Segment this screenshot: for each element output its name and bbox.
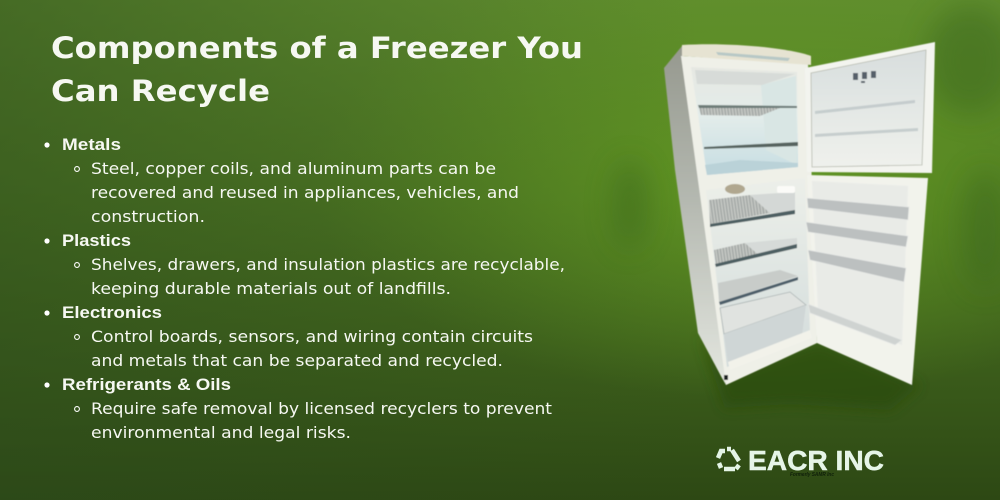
section: metals: construction. [91,207,205,226]
section: electronics: and metals that can be separated and recycled. [91,351,503,370]
upper door [805,42,935,173]
crisper drawer [720,292,812,370]
cabinet front [681,56,817,385]
section: metals: Steel, copper coils, and aluminum parts can be [91,159,496,178]
title [51,31,583,108]
section: metals: recovered and reused in appliances, vehicles, and [91,183,519,202]
lower shelves [709,195,770,224]
section: refrigerants and oils: Refrigerants & Oils [62,375,231,394]
section: metals: Metals [62,135,121,154]
section: electronics [44,303,533,370]
section: plastics: Plastics [62,231,131,250]
icon: recycling symbol [718,449,739,469]
section: electronics: Electronics [62,303,162,322]
lower door [807,175,928,385]
section: plastics: Shelves, drawers, and insulation plastics are recyclable, [91,255,565,274]
lower cavity [706,178,810,367]
illustration: open fridge freezer [664,42,935,385]
title: Components of a Freezer You [51,31,583,65]
section: refrigerants and oils [44,375,552,442]
bulleted list [44,135,565,442]
door label [853,71,876,83]
logo: EACR INC [718,445,884,478]
section: metals [44,135,519,226]
section: refrigerants and oils: Require safe removal by licensed recyclers to prevent [91,399,552,418]
section: refrigerants and oils: environmental and legal risks. [91,423,351,442]
section: plastics [44,231,565,298]
tagline: Formerly SAMR Inc [790,472,834,478]
upper cavity [691,67,798,175]
fan and thermostat [725,184,745,194]
section: electronics: Control boards, sensors, and wiring contain circuits [91,327,533,346]
door bins [806,198,909,345]
top cap [682,44,811,65]
side panel [664,46,726,385]
wordmark: EACR INC [748,445,884,476]
section: plastics: keeping durable materials out of landfills. [91,279,451,298]
floor shadow [700,335,920,410]
hinge foot [724,375,728,380]
title: Can Recycle [51,74,270,108]
upper shelves [699,108,780,116]
